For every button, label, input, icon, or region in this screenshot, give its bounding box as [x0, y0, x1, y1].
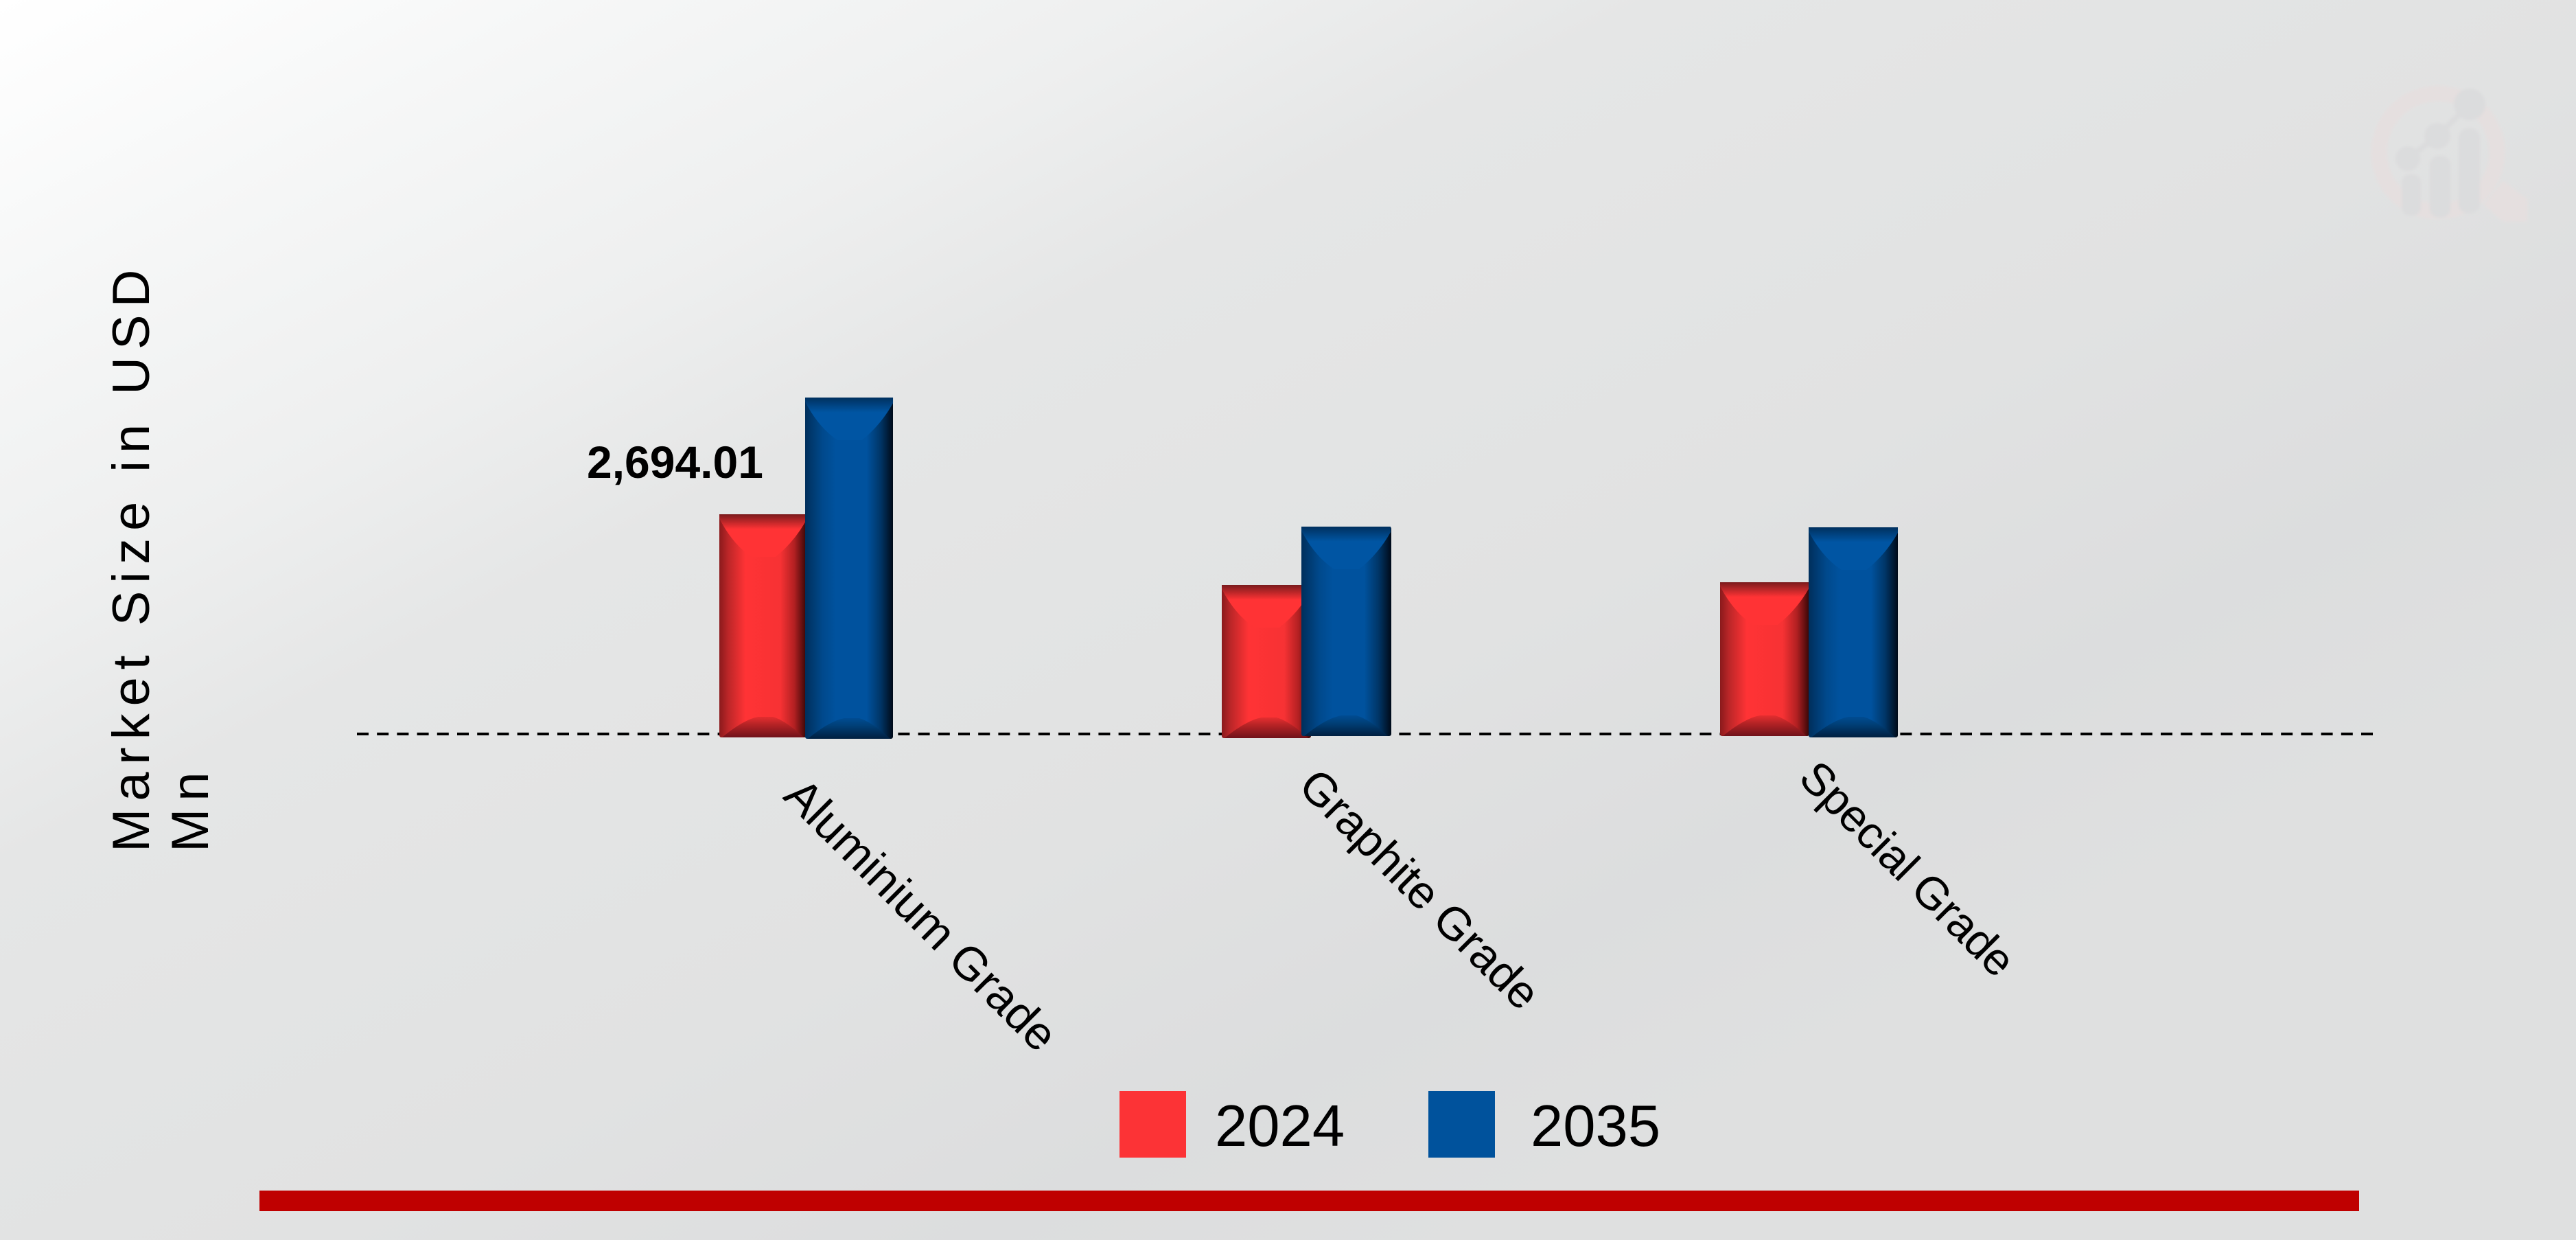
watermark magnifier ring: [2379, 93, 2497, 211]
watermark magnifier handle: [2483, 181, 2527, 222]
watermark nodes: [2395, 89, 2485, 171]
watermark bars: [2402, 128, 2480, 218]
legend swatch 2035: [1428, 1091, 1495, 1158]
category label: Aluminium Grade: Aluminium Grade: [774, 768, 1067, 1061]
legend: [1119, 1091, 1660, 1159]
bar group: Aluminium Grade: [719, 398, 893, 739]
bar: Graphite Grade 2035: [1301, 527, 1391, 736]
bar: Special Grade 2024: [1720, 582, 1809, 736]
bar: Aluminium Grade 2035: [805, 398, 893, 739]
y axis title: Market Size in USD: [102, 262, 161, 852]
bar: Graphite Grade 2024: [1222, 585, 1311, 738]
footer red bar: [259, 1191, 2359, 1211]
baseline dashed line: [357, 733, 2374, 735]
y axis title: Mn: [161, 765, 220, 852]
bar: Special Grade 2035: [1809, 527, 1898, 737]
category label: Special Grade: Special Grade: [1790, 751, 2026, 987]
category label: Graphite Grade: Graphite Grade: [1289, 759, 1550, 1020]
data label: 2,694.01: 2,694.01: [587, 437, 763, 487]
y axis title: [102, 262, 220, 852]
legend swatch 2024: [1119, 1091, 1186, 1158]
watermark logo: [2379, 89, 2527, 222]
watermark trend line: [2408, 104, 2470, 159]
legend label 2024: 2024: [1215, 1094, 1345, 1159]
bar: Aluminium Grade 2024: [719, 514, 807, 737]
legend label 2035: 2035: [1531, 1094, 1660, 1159]
bar group: Special Grade: [1720, 527, 1898, 737]
bar group: Graphite Grade: [1222, 527, 1391, 738]
